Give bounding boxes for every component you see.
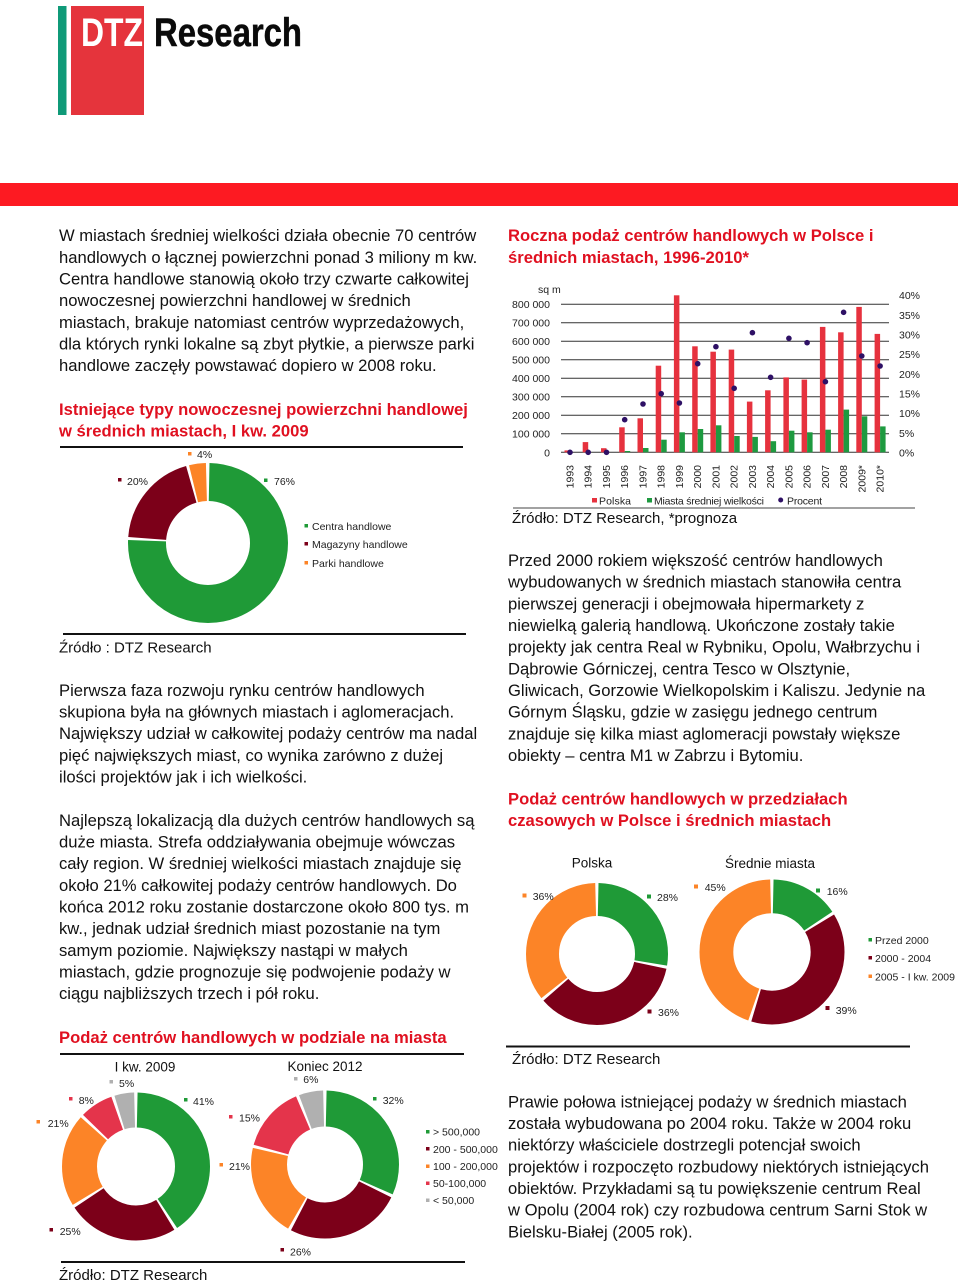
left axis labels: 0 <box>544 448 550 460</box>
heading: types of retail space: w średnich miastach, I kw. 2009 <box>58 421 309 440</box>
donut labels: I kw. 2009: 25% <box>60 1226 81 1238</box>
legend: retail types: Parki handlowe <box>312 558 384 570</box>
legend: annual supply: Polska <box>599 496 631 508</box>
year axis labels: 1996 <box>619 465 631 488</box>
year axis labels: 1999 <box>674 465 686 488</box>
text block: before 2000: znajduje się kilka miast aglomeracji powstały większe <box>508 724 900 743</box>
right axis labels: 15% <box>899 388 920 400</box>
donut labels: Średnie miasta: 16% <box>827 886 848 898</box>
year axis labels: 2009* <box>856 465 868 492</box>
text block: intro: W miastach średniej wielkości działa obecnie 70 centrów <box>59 226 477 245</box>
donut labels: Koniec 2012 <box>220 1074 404 1258</box>
year axis labels: 2010* <box>875 465 887 492</box>
logo: DTZ Research: DTZ <box>81 11 143 55</box>
donut labels: I kw. 2009 <box>36 1078 214 1238</box>
text block: half of supply <box>507 1092 929 1241</box>
donut labels: Średnie miasta: 39% <box>836 1005 857 1017</box>
legend: annual supply <box>592 496 822 508</box>
right axis labels: 5% <box>899 428 914 440</box>
text block: intro: Centra handlowe stanowią około trzy czwarte całkowitej <box>59 270 469 288</box>
heading: supply by period: Podaż centrów handlowych w przedziałach <box>508 790 848 808</box>
left axis labels: 600 000 <box>512 336 550 348</box>
text block: locations: miastach, gdzie prognozuje się podwojenie podaży w <box>59 962 451 982</box>
year axis labels: 2007 <box>820 465 832 488</box>
text block: before 2000 <box>507 551 926 765</box>
text block: locations: Najlepszą lokalizacją dla dużych centrów handlowych są <box>59 811 475 830</box>
text block: locations: samym poziomie. Największy nastąpi w małych <box>59 941 408 960</box>
legend: retail types: Centra handlowe <box>312 521 392 533</box>
donut labels: retail types: 20% <box>127 476 148 488</box>
donut chart: I kw. 2009 <box>80 1110 192 1223</box>
year axis labels: 1997 <box>638 465 650 488</box>
text block: intro <box>59 226 477 375</box>
legend: city size: 200 - 500,000 <box>433 1144 498 1156</box>
heading: types of retail space: Istniejące typy nowoczesnej powierzchni handlowej <box>59 400 468 419</box>
text block: intro: dla których rynki lokalne są zbyt płytkie, a pierwsze parki <box>59 334 474 354</box>
right axis labels: 30% <box>899 330 920 342</box>
legend: annual supply: Miasta średniej wielkości <box>654 496 764 508</box>
donut labels: Koniec 2012: 32% <box>383 1095 404 1107</box>
heading: annual supply: Roczna podaż centrów handlowych w Polsce i <box>508 226 873 245</box>
red banner <box>0 183 958 206</box>
left axis labels: 800 000 <box>512 299 550 311</box>
chart title: I kw. 2009: I kw. 2009 <box>115 1060 175 1074</box>
heading: supply by city: Podaż centrów handlowych w podziale na miasta <box>59 1028 447 1047</box>
text block: half of supply: obiektów. Przykładami są tu powiększenie centrum Real <box>508 1179 921 1198</box>
left axis labels: sq m <box>538 284 561 296</box>
right axis labels: 10% <box>899 408 920 420</box>
year axis labels: 1998 <box>656 465 668 488</box>
logo: DTZ Research: Research <box>154 11 302 55</box>
year axis labels: 2002 <box>729 465 741 488</box>
text block: locations: cały region. W średniej wielkości miastach znajduje się <box>59 854 462 873</box>
heading: supply by period: czasowych w Polsce i średnich miastach <box>508 811 831 830</box>
text block: locations: około 21% całkowitej podaży centrów handlowych. Do <box>59 876 457 895</box>
source: period: Źródło: DTZ Research <box>512 1051 660 1068</box>
legend: annual supply: Procent <box>787 496 822 508</box>
text block: half of supply: niektórzy właściciele dostrzegli potencjał swoich <box>508 1136 861 1155</box>
text block: before 2000: niewielką galerią handlową. Ukończone zostały takie <box>508 616 895 635</box>
donut labels: Średnie miasta <box>694 882 857 1017</box>
left axis labels: 200 000 <box>512 410 550 422</box>
legend: city size: < 50,000 <box>433 1195 474 1207</box>
text block: first phase: Największy udział w całkowitej podaży centrów ma nadal <box>59 724 477 743</box>
text block: locations: kw., jednak udział średnich miast pozostanie na tym <box>59 919 440 938</box>
donut labels: I kw. 2009: 41% <box>193 1096 214 1108</box>
donut chart: Średnie miasta <box>716 896 828 1008</box>
chart title: Koniec 2012: Koniec 2012 <box>287 1059 363 1074</box>
heading: annual supply <box>508 226 873 267</box>
text block: locations: ciągu najbliższych trzech i pół roku. <box>59 984 319 1003</box>
text block: intro: handlowych o łącznej powierzchni ponad 3 miliony m kw. <box>59 248 477 267</box>
text block: before 2000: pierwszej generacji i obejmowała hipermarkety z <box>508 594 864 613</box>
text block: half of supply: została wybudowana po 2004 roku. Także w 2004 roku <box>508 1114 911 1133</box>
left axis labels: 500 000 <box>512 354 550 366</box>
year axis labels: 2006 <box>802 465 814 488</box>
donut labels: Polska: 36% <box>533 891 554 903</box>
text block: before 2000: wybudowanych w średnich miastach stanowiła centra <box>507 573 902 592</box>
year axis labels: 1994 <box>583 465 595 488</box>
text block: half of supply: w Opolu (2004 rok) czy rozbudowa centrum Sarni Stok w <box>507 1201 928 1220</box>
heading: annual supply: średnich miastach, 1996-2010* <box>508 248 750 267</box>
donut labels: Koniec 2012: 6% <box>303 1074 318 1086</box>
year axis labels: 2004 <box>765 465 777 488</box>
year axis labels <box>564 465 887 492</box>
legend: city size: 100 - 200,000 <box>433 1161 498 1173</box>
legend: period <box>868 935 955 984</box>
text block: first phase <box>59 681 477 786</box>
text block: before 2000: Gliwicach, Gorzowie Wielkopolskim i Kaliszu. Jedynie na <box>508 681 926 700</box>
text block: locations: końca 2012 roku zostanie dostarczone około 800 tys. m <box>59 898 469 916</box>
text block: before 2000: Przed 2000 rokiem większość centrów handlowych <box>508 551 883 570</box>
right axis labels <box>899 290 920 460</box>
bars: Miasta średniej wielkości <box>625 410 886 452</box>
right axis labels: 25% <box>899 349 920 361</box>
donut chart: Koniec 2012 <box>269 1108 381 1220</box>
donut labels: retail types <box>118 449 295 488</box>
donut labels: I kw. 2009: 5% <box>119 1078 134 1090</box>
legend: city size: 50-100,000 <box>433 1178 486 1190</box>
legend: retail types <box>304 521 408 570</box>
legend: period: 2000 - 2004 <box>875 953 931 965</box>
left axis labels: 400 000 <box>512 373 550 385</box>
year axis labels: 2003 <box>747 465 759 488</box>
text block: half of supply: projektów i rozpoczęto rozbudowy niektórych istniejących <box>508 1157 929 1176</box>
text block: before 2000: Dąbrowie Górniczej, centra Tesco w Olsztynie, <box>508 659 850 678</box>
year axis labels: 2008 <box>838 465 850 488</box>
legend: period: Przed 2000 <box>875 935 929 947</box>
text block: before 2000: projekty jak centra Real w Rybniku, Opolu, Wałbrzychu i <box>508 638 920 657</box>
heading: types of retail space <box>58 400 468 440</box>
donut labels: retail types: 76% <box>274 476 295 488</box>
legend: city size: > 500,000 <box>433 1126 480 1138</box>
year axis labels: 2001 <box>710 465 722 488</box>
year axis labels: 1993 <box>564 465 576 488</box>
donut labels: Koniec 2012: 26% <box>290 1246 311 1258</box>
donut labels: Koniec 2012: 21% <box>229 1161 250 1173</box>
year axis labels: 2000 <box>692 465 704 488</box>
donut labels: I kw. 2009: 8% <box>79 1095 94 1107</box>
left axis labels: 300 000 <box>512 392 550 404</box>
donut labels: Polska: 28% <box>657 892 678 904</box>
donut labels: Polska: 36% <box>658 1007 679 1019</box>
text block: intro: handlowe zaczęły powstawać dopiero w 2008 roku. <box>59 356 437 375</box>
chart: annual supply bars and dots <box>561 295 889 455</box>
year axis labels: 1995 <box>601 465 613 488</box>
chart title: Średnie miasta: Średnie miasta <box>725 856 816 871</box>
legend: period: 2005 - I kw. 2009 <box>875 972 955 984</box>
right axis labels: 40% <box>899 290 920 302</box>
legend: city size <box>426 1126 498 1207</box>
donut labels: Polska <box>522 891 679 1019</box>
text block: before 2000: obiekty – centra M1 w Zabrzu i Bytomiu. <box>508 746 803 765</box>
text block: intro: nowoczesnej powierzchni handlowej w średnich <box>59 291 411 310</box>
legend: retail types: Magazyny handlowe <box>312 539 408 551</box>
left axis labels: 100 000 <box>512 428 550 440</box>
donut labels: retail types: 4% <box>197 449 212 461</box>
right axis labels: 20% <box>899 369 920 381</box>
donut chart: Polska <box>542 900 652 1008</box>
text block: first phase: skupiona była na głównych miastach i aglomeracjach. <box>59 702 454 722</box>
donut labels: I kw. 2009: 21% <box>48 1118 69 1130</box>
text block: locations <box>59 811 475 1003</box>
text block: half of supply: Prawie połowa istniejącej podaży w średnich miastach <box>508 1092 907 1112</box>
source: annual supply: Źródło: DTZ Research, *prognoza <box>512 510 738 527</box>
source: retail types: Źródło : DTZ Research <box>59 640 212 656</box>
text block: locations: duże miasta. Strefa oddziaływania obejmuje wówczas <box>59 832 455 852</box>
dots: Procent <box>567 310 883 455</box>
text block: intro: miastach, brakuje natomiast centrów wyprzedażowych, <box>59 313 464 332</box>
right axis labels: 35% <box>899 310 920 322</box>
left axis labels <box>512 284 561 460</box>
text block: half of supply: Bielsku-Białej (2005 rok). <box>508 1222 693 1241</box>
donut labels: Koniec 2012: 15% <box>239 1112 260 1124</box>
text block: before 2000: Górnym Śląsku, gdzie w zasięgu jednego centrum <box>508 703 877 722</box>
text block: first phase: ilości projektów jak i ich wielkości. <box>59 768 307 786</box>
donut labels: Średnie miasta: 45% <box>705 882 726 894</box>
right axis labels: 0% <box>899 448 914 460</box>
text block: first phase: pięć największych miast, co wynika zarówno z dużej <box>59 746 443 765</box>
donut chart: retail types <box>147 482 269 604</box>
chart title: Polska: Polska <box>572 856 613 870</box>
bars: Polska <box>564 295 880 452</box>
year axis labels: 2005 <box>783 465 795 488</box>
logo: DTZ Research <box>58 6 302 115</box>
text block: first phase: Pierwsza faza rozwoju rynku centrów handlowych <box>59 681 425 700</box>
heading: supply by period <box>508 790 848 830</box>
left axis labels: 700 000 <box>512 318 550 330</box>
